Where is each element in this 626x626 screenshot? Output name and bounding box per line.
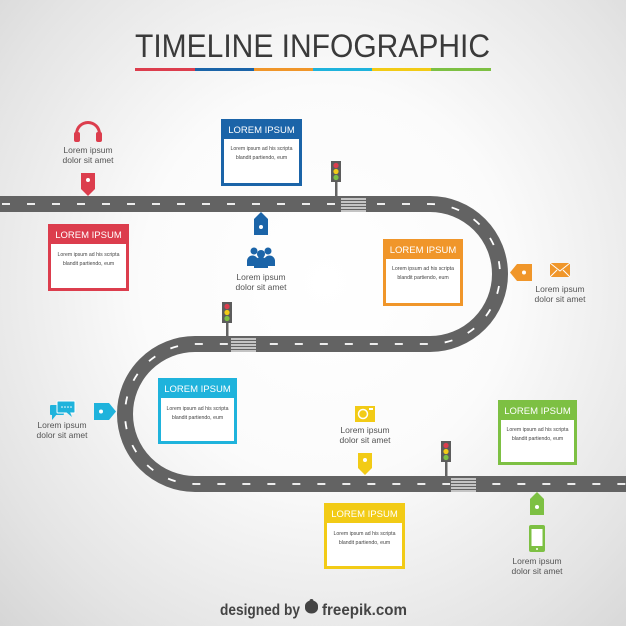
text: envelope caption: dolor sit amet <box>534 294 586 304</box>
panel: green: LOREM IPSUM <box>504 406 571 417</box>
marker: yellow pin <box>358 453 372 475</box>
panel: blue <box>221 119 302 184</box>
text: headphones caption <box>62 145 114 165</box>
text: phone caption <box>511 556 563 576</box>
icon: camera <box>355 406 375 422</box>
panel: yellow <box>324 503 405 568</box>
panel: red: blandit partiendo, eum <box>63 261 114 267</box>
panel: orange <box>383 239 463 304</box>
footer credit: freepik.com <box>322 602 407 619</box>
text: camera caption: Lorem ipsum <box>340 425 390 435</box>
panel: yellow: Lorem ipsum ad his scripta <box>334 531 396 537</box>
icon: people <box>247 248 275 268</box>
text: phone caption: Lorem ipsum <box>512 556 562 566</box>
marker: cyan tag <box>94 403 116 420</box>
footer credit <box>220 599 407 619</box>
title: TIMELINE INFOGRAPHIC <box>135 28 490 64</box>
road <box>0 204 626 484</box>
panel: blue: blandit partiendo, eum <box>236 155 287 161</box>
marker: blue tag <box>254 212 268 235</box>
text: phone caption: dolor sit amet <box>511 566 563 576</box>
panel: orange: LOREM IPSUM <box>390 245 456 256</box>
panel: red: Lorem ipsum ad his scripta <box>58 252 120 258</box>
panel: green <box>498 400 577 464</box>
icon: phone <box>529 525 545 552</box>
text: envelope caption: Lorem ipsum <box>535 284 585 294</box>
panel: cyan: blandit partiendo, eum <box>172 415 223 421</box>
footer credit: designed by <box>220 602 300 619</box>
text: people caption <box>235 272 287 292</box>
panel: red <box>48 224 129 290</box>
panel: green: Lorem ipsum ad his scripta <box>506 427 569 433</box>
marker: orange tag <box>510 264 532 281</box>
panel: cyan: Lorem ipsum ad his scripta <box>166 406 229 412</box>
text: chat caption: Lorem ipsum <box>37 420 87 430</box>
text: camera caption <box>339 425 391 445</box>
panel: cyan <box>158 378 237 442</box>
icon: chat <box>50 401 75 420</box>
panel: green: blandit partiendo, eum <box>512 436 563 442</box>
panel: yellow: LOREM IPSUM <box>331 509 398 520</box>
text: people caption: Lorem ipsum <box>236 272 286 282</box>
traffic light: top <box>331 161 341 198</box>
text: chat caption <box>36 420 88 440</box>
panel: yellow: blandit partiendo, eum <box>339 540 390 546</box>
text: chat caption: dolor sit amet <box>36 430 88 440</box>
panel: orange: blandit partiendo, eum <box>397 275 449 281</box>
panel: orange: Lorem ipsum ad his scripta <box>392 266 454 272</box>
text: headphones caption: dolor sit amet <box>62 155 114 165</box>
marker: red pin <box>81 173 95 196</box>
text: people caption: dolor sit amet <box>235 282 287 292</box>
text: envelope caption <box>534 284 586 304</box>
panel: cyan: LOREM IPSUM <box>164 384 231 395</box>
panel: blue: Lorem ipsum ad his scripta <box>230 146 293 152</box>
crosswalks <box>230 196 477 492</box>
text: camera caption: dolor sit amet <box>339 435 391 445</box>
traffic light: middle <box>222 302 232 339</box>
title underline <box>135 68 491 71</box>
panel: blue: LOREM IPSUM <box>228 125 295 136</box>
traffic light: bottom <box>441 441 451 478</box>
icon: envelope <box>550 263 570 277</box>
panel: red: LOREM IPSUM <box>55 230 122 241</box>
text: headphones caption: Lorem ipsum <box>63 145 113 155</box>
icon: headphones <box>74 121 102 142</box>
marker: green tag <box>530 492 544 515</box>
